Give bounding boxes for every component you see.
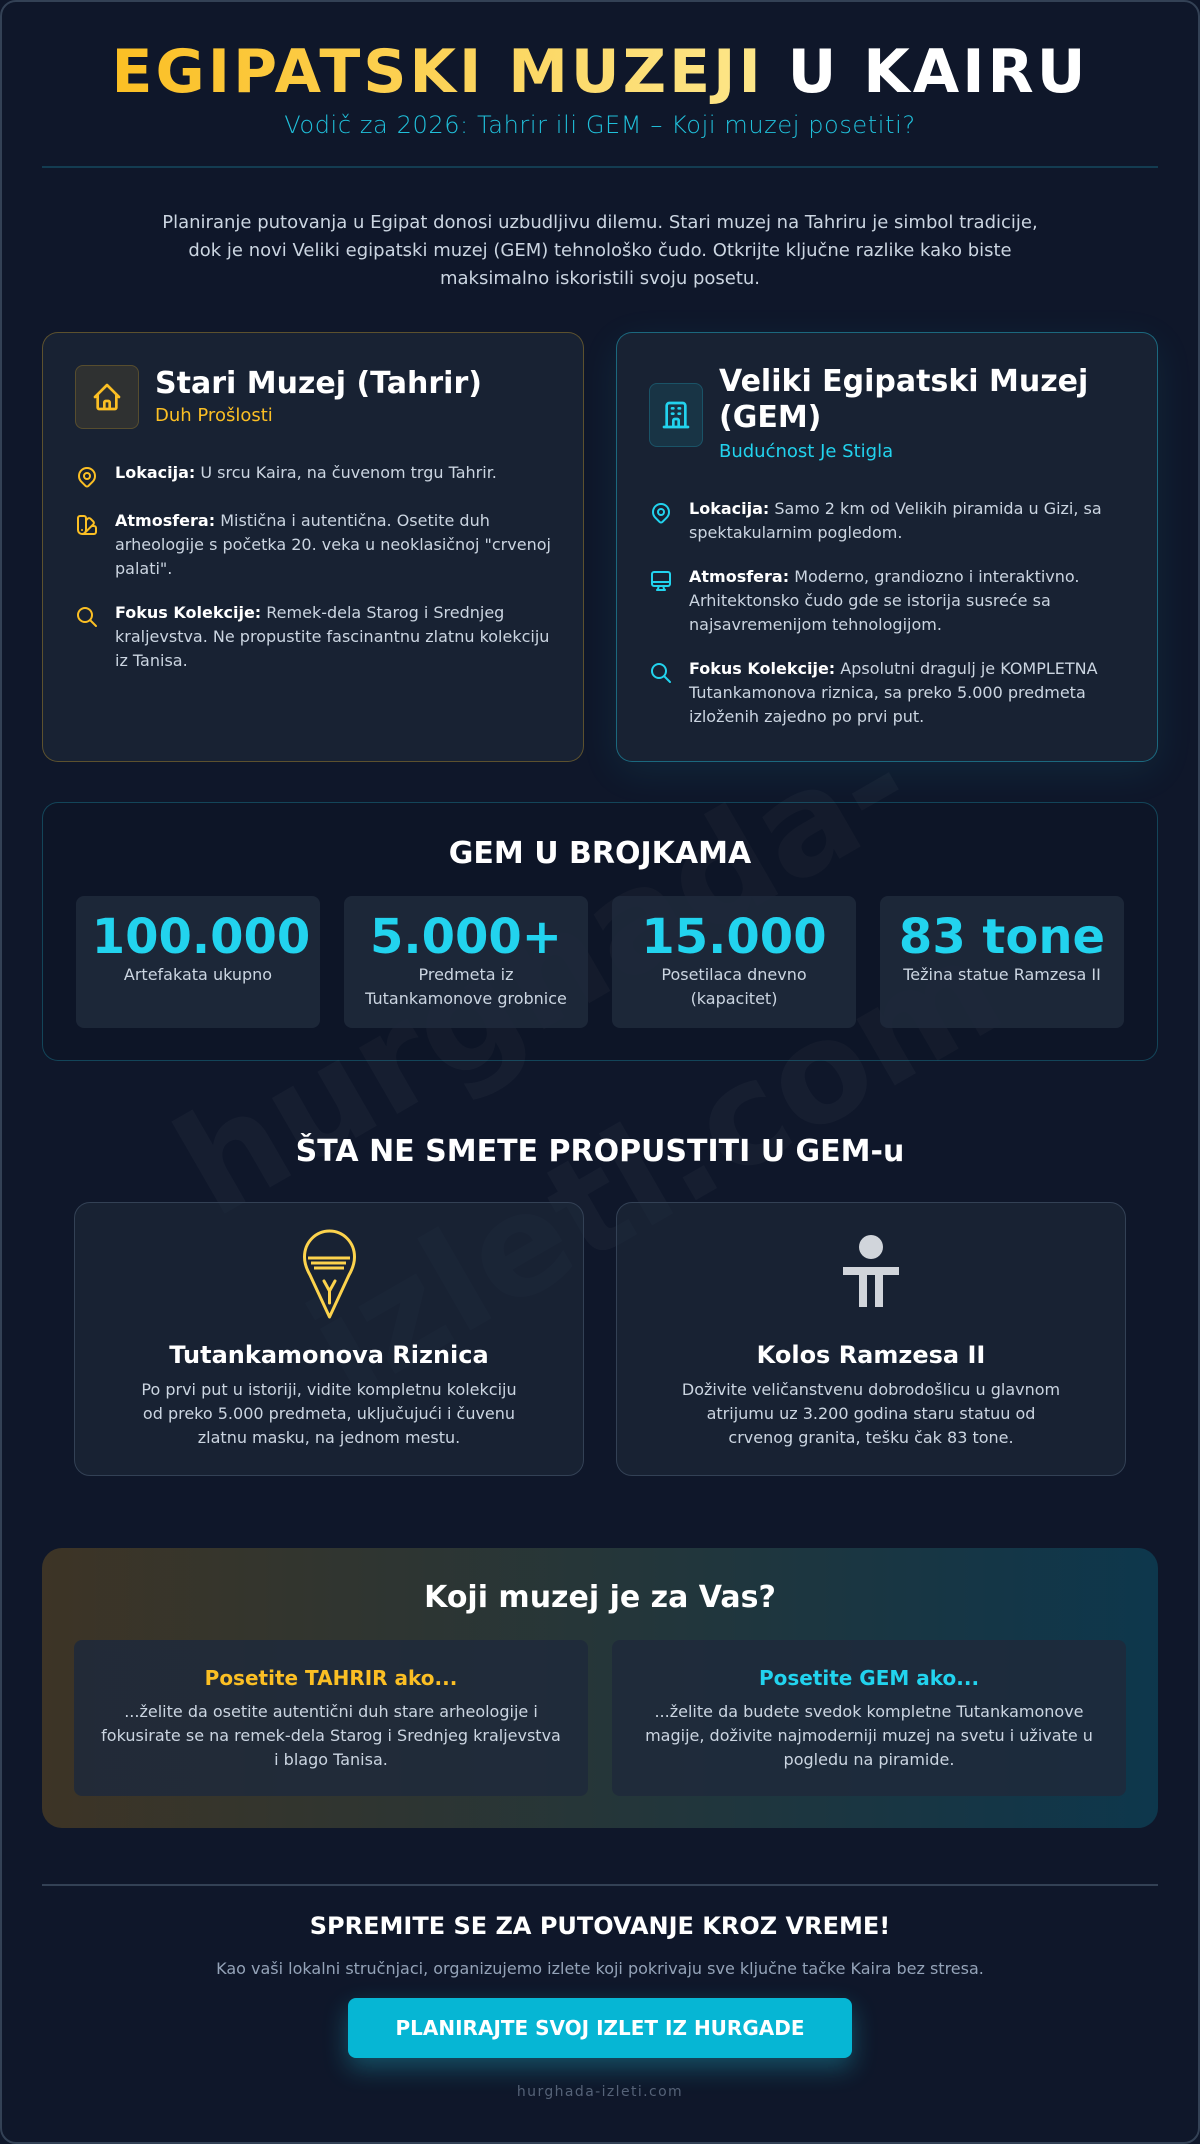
text: atmosfera: Atmosfera: Mistična i autentična. Osetite duh <box>115 511 490 530</box>
icon: tutankhamun mask <box>303 1230 356 1318</box>
text: od preko 5.000 predmeta, uključujući i čuvenu <box>143 1404 515 1423</box>
icon: swatch <box>77 515 97 535</box>
heading: sta ne smete propustiti: ŠTA NE SMETE PROPUSTITI U GEM-u <box>296 1134 904 1169</box>
text <box>682 1380 1060 1447</box>
heading: Kolos Ramzesa II <box>757 1341 985 1369</box>
stat: posetioci: 15.000 <box>641 909 827 965</box>
text: fokus kolekcije: kraljevstva. Ne propustite fascinantnu zlatnu kolekciju <box>115 627 549 646</box>
icon: location <box>652 503 670 524</box>
stat: predmeti: 5.000+ <box>370 909 562 965</box>
text: atmosfera: Atmosfera: Moderno, grandiozno i interaktivno. <box>689 567 1080 586</box>
icon: colossus <box>843 1235 899 1307</box>
watermark <box>0 578 1200 1566</box>
text: fokusirate se na remek-dela Starog i Srednjeg kraljevstva <box>101 1726 561 1745</box>
text: atmosfera: arheologije s početka 20. veka u neoklasičnoj "crvenoj <box>115 535 551 554</box>
stat: tezina: Težina statue Ramzesa II <box>903 965 1101 984</box>
text: atmosfera: najsavremenijom tehnologijom. <box>689 615 942 634</box>
text: fokus kolekcije: Fokus Kolekcije: Apsolutni dragulj je KOMPLETNA <box>689 659 1098 678</box>
text <box>101 1702 561 1769</box>
text: atmosfera: Arhitektonsko čudo gde se istorija susreće sa <box>689 591 1051 610</box>
stat: artefakti: Artefakata ukupno <box>124 965 272 984</box>
icon: search <box>651 663 671 683</box>
heading: Veliki Egipatski Muzej <box>719 364 1088 435</box>
text: i blago Tanisa. <box>274 1750 388 1769</box>
intro text: maksimalno iskoristili svoju posetu. <box>440 268 760 289</box>
icon: search <box>77 607 97 627</box>
stat: posetioci <box>612 896 856 1028</box>
panel: Tutankamonova riznica <box>74 1202 584 1476</box>
text: atmosfera <box>689 567 1080 634</box>
button <box>348 1998 852 2058</box>
text: fokus kolekcije <box>688 659 1098 726</box>
subheading: Posetite GEM ako... <box>759 1666 979 1690</box>
heading: GEM u brojkama: GEM U BROJKAMA <box>449 836 751 871</box>
text: atrijumu uz 3.200 godina staru statuu od <box>707 1404 1035 1423</box>
text: lokacija: Lokacija: Samo 2 km od Velikih piramida u Gizi, sa <box>689 499 1102 518</box>
text: atmosfera: palati". <box>115 559 172 578</box>
panel: GEM u brojkama <box>42 802 1158 1061</box>
text: crvenog granita, tešku čak 83 tone. <box>728 1428 1014 1447</box>
panel: Stari Muzej <box>42 332 584 762</box>
heading: Veliki Egipatski Muzej: Veliki Egipatski Muzej <box>719 364 1088 399</box>
text: fokus kolekcije: izloženih zajedno po prvi put. <box>689 707 924 726</box>
text: lokacija: spektakularnim pogledom. <box>689 523 902 542</box>
stat: artefakti: 100.000 <box>92 909 310 965</box>
text: fokus kolekcije <box>115 603 549 670</box>
text: Doživite veličanstvenu dobrodošlicu u glavnom <box>682 1380 1060 1399</box>
text: lokacija: Lokacija: U srcu Kaira, na čuvenom trgu Tahrir. <box>115 463 497 482</box>
heading: Veliki Egipatski Muzej: (GEM) <box>719 400 821 435</box>
text: fokus kolekcije: Fokus Kolekcije: Remek-dela Starog i Srednjeg <box>115 603 504 622</box>
panel: koji muzej je za vas <box>42 1548 1158 1828</box>
text <box>141 1380 517 1447</box>
watermark: hurghada- <box>150 700 938 1249</box>
text: ...želite da osetite autentični duh stare arheologije i <box>124 1702 538 1721</box>
stat: tezina <box>880 896 1124 1028</box>
stat: predmeti <box>344 896 588 1028</box>
text: pogledu na piramide. <box>784 1750 954 1769</box>
footer heading: SPREMITE SE ZA PUTOVANJE KROZ VREME! <box>310 1912 890 1940</box>
text: zlatnu masku, na jednom mestu. <box>198 1428 460 1447</box>
subheading: Budućnost Je Stigla <box>719 441 893 462</box>
icon: monitor <box>651 571 671 591</box>
heading: Koji muzej je za Vas? <box>424 1580 776 1615</box>
box: Tahrir <box>74 1640 588 1796</box>
text: Po prvi put u istoriji, vidite kompletnu kolekciju <box>141 1380 517 1399</box>
header divider <box>42 166 1158 168</box>
stat: posetioci: Posetilaca dnevno <box>661 965 807 984</box>
subheading: Posetite TAHRIR ako... <box>205 1666 457 1690</box>
heading: Tutankamonova Riznica <box>169 1341 489 1369</box>
intro text: dok je novi Veliki egipatski muzej (GEM) tehnološko čudo. Otkrijte ključne razlike kako biste <box>188 240 1012 261</box>
stat: predmeti: Tutankamonove grobnice <box>365 989 567 1008</box>
footer text: Kao vaši lokalni stručnjaci, organizujemo izlete koji pokrivaju sve ključne tačke Kaira bez stresa. <box>216 1959 984 1978</box>
panel: Veliki Egipatski Muzej <box>616 332 1158 762</box>
icon: house <box>75 365 139 429</box>
watermark: izleti.com <box>284 907 1028 1431</box>
title: EGIPATSKI MUZEJI U KAIRU <box>112 37 1088 107</box>
box: GEM <box>612 1640 1126 1796</box>
footer divider <box>42 1884 1158 1886</box>
heading: Stari Muzej: Stari Muzej (Tahrir) <box>155 366 482 401</box>
text: magije, doživite najmoderniji muzej na svetu i uživate u <box>645 1726 1093 1745</box>
text: fokus kolekcije: Tutankamonova riznica, sa preko 5.000 predmeta <box>689 683 1086 702</box>
panel: Kolos Ramzesa II <box>616 1202 1126 1476</box>
intro text <box>162 212 1038 289</box>
stat: predmeti: Predmeta iz <box>418 965 514 984</box>
subtitle: Vodič za 2026: Tahrir ili GEM – Koji muzej posetiti? <box>284 111 916 139</box>
text: ...želite da budete svedok kompletne Tutankamonove <box>654 1702 1084 1721</box>
text: lokacija <box>689 499 1102 542</box>
icon: building <box>649 383 703 447</box>
text: fokus kolekcije: iz Tanisa. <box>115 651 188 670</box>
text: atmosfera <box>115 511 551 578</box>
footer website: hurghada-izleti.com <box>517 2084 683 2100</box>
text <box>645 1702 1093 1769</box>
icon: location <box>78 467 96 488</box>
stat: artefakti <box>76 896 320 1028</box>
button: PLANIRAJTE SVOJ IZLET IZ HURGADE <box>396 2016 804 2040</box>
subheading: Duh Prošlosti <box>155 405 273 426</box>
stat: posetioci: (kapacitet) <box>691 989 777 1008</box>
stat: tezina: 83 tone <box>899 909 1105 965</box>
intro text: Planiranje putovanja u Egipat donosi uzbudljivu dilemu. Stari muzej na Tahriru je simbol tradicije, <box>162 212 1038 233</box>
